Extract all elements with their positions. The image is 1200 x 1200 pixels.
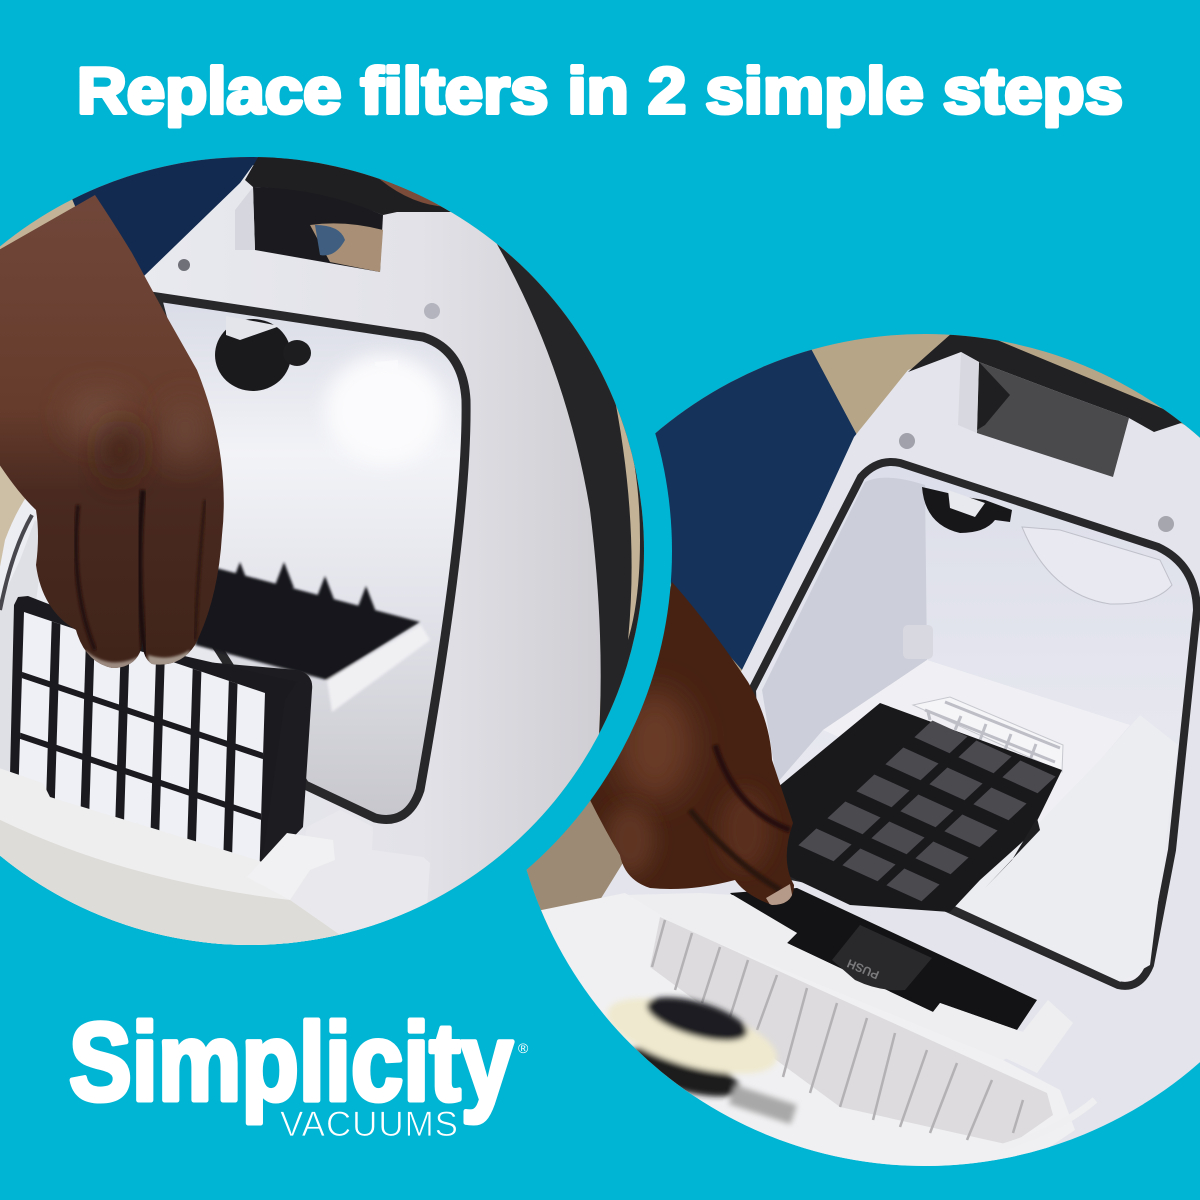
door outer rim bbox=[1000, 1100, 1095, 1148]
title: Replace filters in 2 simple steps bbox=[77, 54, 1123, 127]
compartment shelf bbox=[823, 660, 1178, 982]
HEPA filter bbox=[10, 596, 312, 883]
darker left wall of compartment bbox=[762, 478, 927, 783]
hinge body block bbox=[290, 810, 430, 937]
soft highlight on rear wall bbox=[325, 355, 445, 465]
vacuum handle bbox=[899, 325, 1190, 532]
gasket segment by slot bbox=[945, 905, 1120, 985]
door tray bbox=[517, 893, 1095, 1180]
tan floor sliver right of band bbox=[616, 404, 640, 640]
vacuum body bbox=[0, 165, 602, 960]
vacuum handle bbox=[178, 157, 451, 319]
cream exhaust seal bbox=[599, 983, 797, 1124]
hand pulling filter bbox=[590, 582, 794, 905]
lip between slot and door bbox=[625, 893, 1050, 1060]
hand holding filter bbox=[0, 190, 230, 675]
hinge block bbox=[1003, 1000, 1073, 1073]
wordmark: Simplicity bbox=[69, 1001, 513, 1124]
white round motor cover bbox=[1022, 527, 1172, 604]
black side band bbox=[496, 244, 644, 734]
door opening dark slot bbox=[730, 888, 1037, 1030]
photo: step 1, lifting the HEPA filter bbox=[0, 145, 660, 960]
foam filter blurred in background bbox=[195, 562, 430, 712]
ribbed door wall bbox=[650, 917, 1053, 1145]
Simplicity Vacuums logo bbox=[69, 1001, 529, 1144]
open filter compartment with gasket bbox=[752, 462, 1197, 986]
white strap and grey panel beside filter bbox=[0, 514, 38, 772]
black knob in compartment bbox=[922, 487, 1012, 533]
PUSH tab bbox=[832, 925, 932, 990]
photo: step 2, removing the foam filter bbox=[500, 325, 1200, 1180]
cyan ring separating the two photos bbox=[0, 129, 672, 973]
filter side housing bbox=[212, 662, 312, 860]
black knob in compartment bbox=[215, 319, 311, 391]
door ribs bbox=[652, 920, 1023, 1140]
registered mark: ® bbox=[518, 1040, 529, 1056]
filter frame bbox=[10, 596, 262, 862]
fingers behind handle bbox=[379, 178, 441, 206]
PUSH tab: PUSH bbox=[845, 956, 881, 982]
peg on rear wall bbox=[903, 625, 933, 659]
photo backdrop: jeans and floor bbox=[0, 150, 650, 950]
photo backdrop: floor and jeans bbox=[500, 330, 1200, 930]
filter pleated panel and grid bbox=[18, 612, 265, 883]
VACUUMS subline: VACUUMS bbox=[280, 1105, 458, 1144]
hinge arm bbox=[247, 833, 335, 900]
foam filter held in hand bbox=[776, 703, 1062, 912]
door bottom with hinge bbox=[0, 765, 430, 960]
vacuum body bbox=[600, 350, 1200, 1170]
open compartment with gasket bbox=[157, 297, 466, 819]
